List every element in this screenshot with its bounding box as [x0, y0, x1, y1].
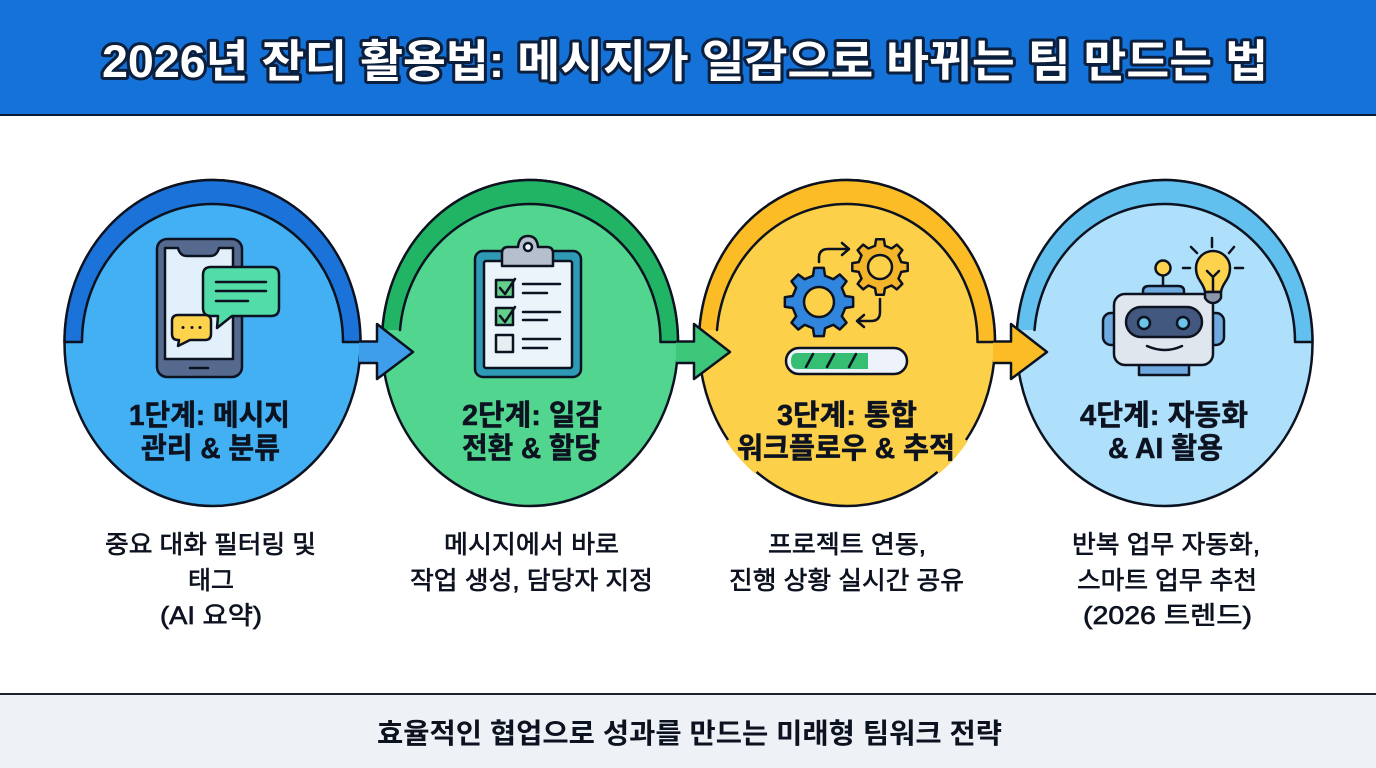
- step 1 label: 관리 & 분류: [141, 432, 280, 465]
- panel: step 2 circle: [382, 180, 678, 506]
- header banner: [0, 0, 1376, 116]
- text block: step 1 description: 태그: [188, 567, 234, 595]
- icon: gears with cycle arrows: [785, 239, 908, 374]
- step 1 label: 1단계: 메시지: [129, 399, 290, 432]
- text block: step 1 description: (AI 요약): [160, 602, 262, 630]
- step 2 label: 전환 & 할당: [462, 432, 600, 465]
- text block: step 3 description: 프로젝트 연동,: [768, 531, 926, 559]
- arrow: step 2 to step 3: [676, 324, 730, 379]
- text block: step 1 description: [105, 531, 316, 630]
- step 4 label: & AI 활용: [1108, 432, 1223, 465]
- step 4 label: 4단계: 자동화: [1080, 399, 1248, 432]
- text block: step 1 description: 중요 대화 필터링 및: [105, 531, 316, 559]
- text block: step 4 description: (2026 트렌드): [1083, 602, 1252, 630]
- panel: step 1 circle: [64, 180, 360, 506]
- step 3 label: 3단계: 통합: [777, 399, 917, 432]
- step 2 label: [462, 399, 602, 465]
- title: 2026년 잔디 활용법: 메시지가 일감으로 바뀌는 팀 만드는 법: [102, 36, 1268, 87]
- text block: step 2 description: [410, 531, 653, 595]
- footer text: 효율적인 협업으로 성과를 만드는 미래형 팀워크 전략: [377, 718, 1002, 749]
- text block: step 4 description: 스마트 업무 추천: [1077, 567, 1257, 595]
- icon: robot with light bulb: [1103, 238, 1243, 375]
- arrow: step 3 to step 4: [993, 324, 1047, 379]
- text block: step 2 description: 작업 생성, 담당자 지정: [410, 567, 653, 595]
- step 2 label: 2단계: 일감: [462, 399, 602, 432]
- step 4 label: [1080, 399, 1248, 465]
- footer banner: [0, 693, 1376, 768]
- step 1 label: [129, 399, 290, 465]
- step 3 label: 워크플로우 & 추적: [737, 432, 955, 465]
- text block: step 2 description: 메시지에서 바로: [444, 531, 619, 559]
- text block: step 4 description: [1072, 531, 1260, 630]
- step 3 label: [737, 399, 955, 465]
- icon: clipboard checklist: [475, 236, 581, 377]
- text block: step 3 description: 진행 상황 실시간 공유: [729, 567, 964, 595]
- text block: step 3 description: [729, 531, 964, 595]
- panel: step 3 circle: [699, 180, 995, 506]
- arrow: step 1 to step 2: [359, 324, 413, 379]
- text block: step 4 description: 반복 업무 자동화,: [1072, 531, 1260, 559]
- icon: phone with chat bubbles: [157, 239, 279, 377]
- panel: step 4 circle: [1016, 180, 1312, 506]
